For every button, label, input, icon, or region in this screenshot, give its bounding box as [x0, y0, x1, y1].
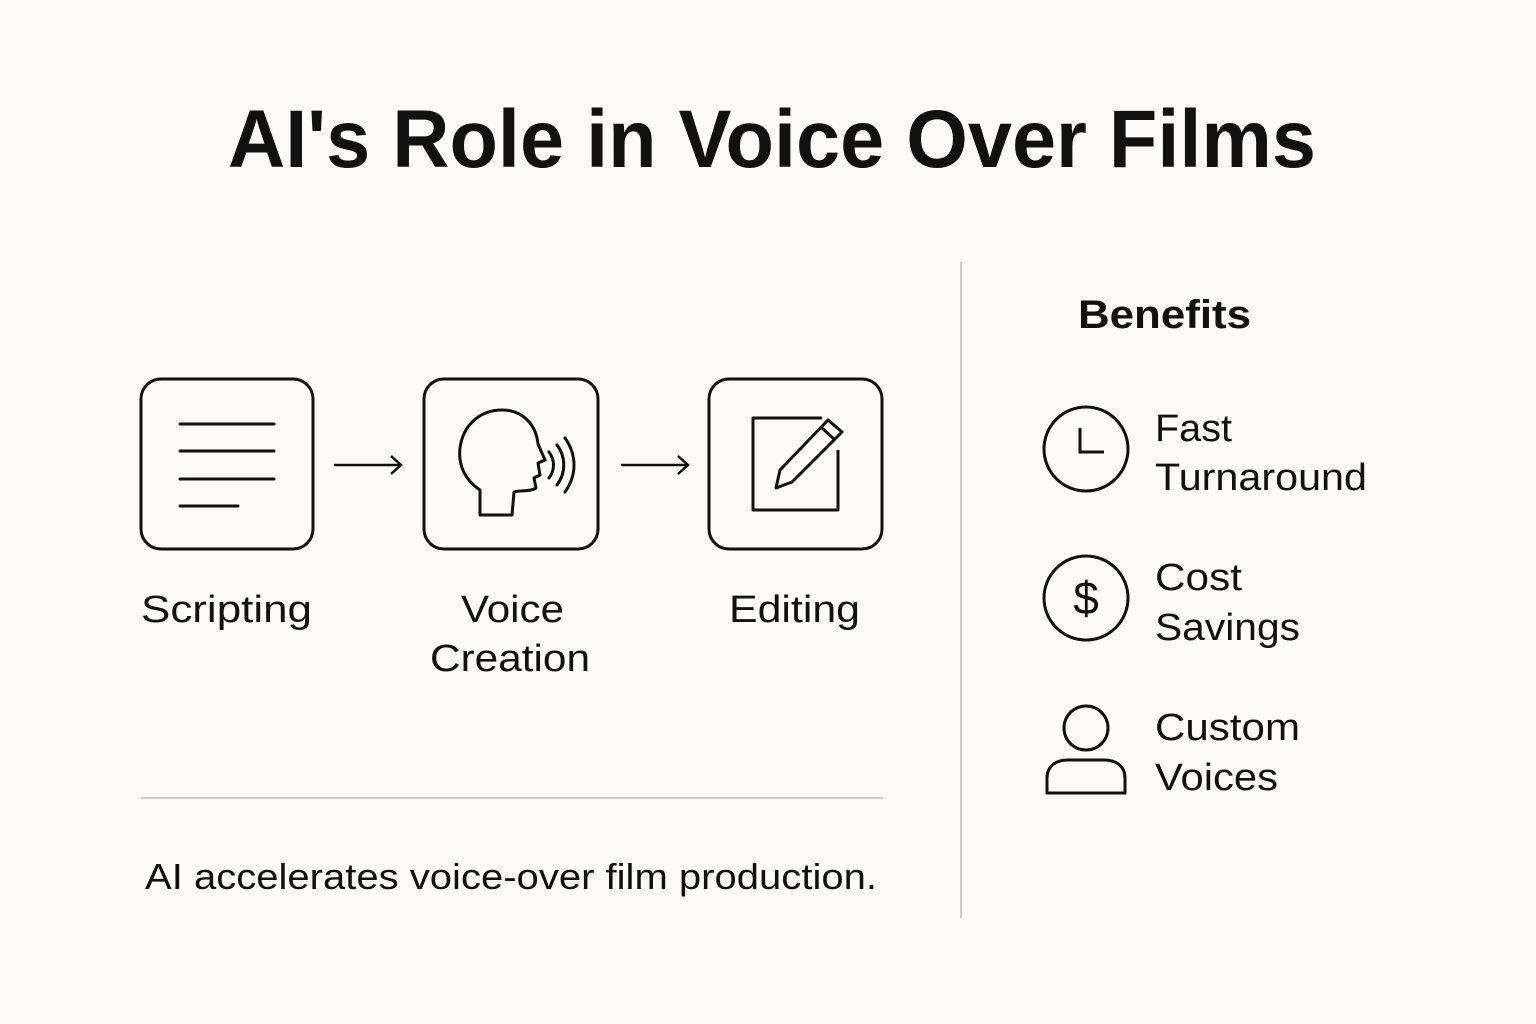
benefit: custom voices: Custom	[1155, 707, 1300, 749]
benefit: cost savings: $	[1073, 572, 1099, 624]
benefit: fast turnaround	[1044, 407, 1367, 499]
benefit: custom voices: Voices	[1155, 757, 1278, 799]
step labels	[141, 589, 860, 680]
footer text: AI accelerates voice-over film production.	[145, 856, 877, 897]
step: editing	[709, 379, 882, 549]
benefit: fast turnaround: Fast	[1155, 408, 1232, 450]
icon: speaking head	[460, 410, 574, 515]
benefit: cost savings	[1044, 556, 1300, 649]
step: scripting	[141, 379, 313, 549]
step: voice creation	[424, 379, 598, 549]
icon: document lines	[180, 424, 274, 506]
benefits heading: Benefits	[1078, 293, 1251, 337]
step labels: Creation	[430, 638, 590, 680]
benefit: cost savings: Savings	[1155, 607, 1300, 649]
benefit: fast turnaround: Turnaround	[1155, 457, 1367, 499]
step labels: Editing	[729, 589, 860, 631]
icon: edit pencil	[753, 418, 842, 510]
arrow 1	[334, 456, 401, 474]
arrow 2	[621, 456, 688, 474]
title: AI's Role in Voice Over Films	[228, 94, 1316, 185]
step labels: Voice	[461, 589, 564, 631]
benefit: cost savings: Cost	[1155, 557, 1242, 599]
benefit: custom voices	[1047, 706, 1300, 799]
step labels: Scripting	[141, 589, 312, 631]
